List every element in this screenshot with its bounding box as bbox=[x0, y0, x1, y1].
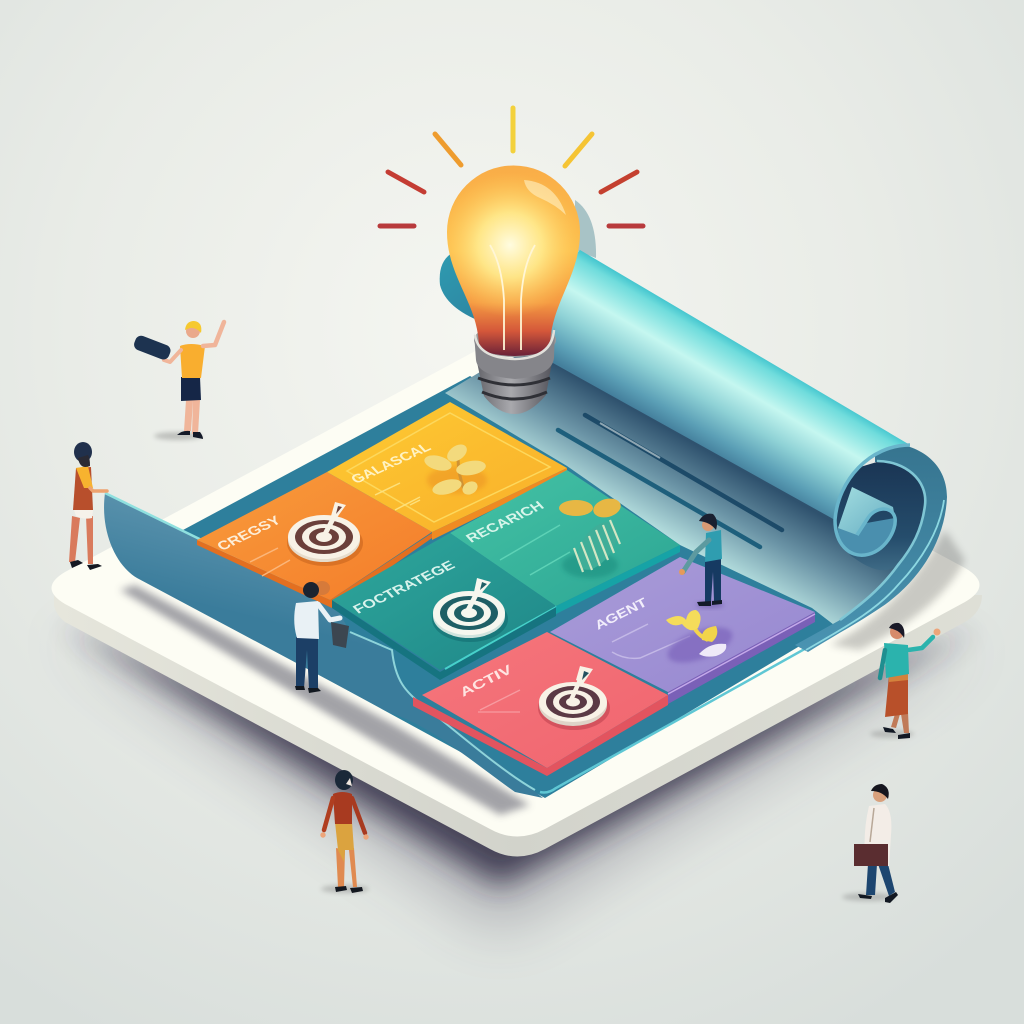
platform top surface bbox=[52, 328, 980, 836]
icon: target bbox=[432, 578, 508, 642]
curl light lip bbox=[806, 500, 944, 650]
bulb rays bbox=[380, 108, 643, 226]
card surface bbox=[332, 533, 556, 670]
card highlight edge bbox=[668, 614, 815, 694]
outer curl band bbox=[795, 443, 947, 652]
collar rim bbox=[475, 330, 554, 359]
person: woman with megaphone bbox=[132, 321, 224, 440]
grey curl behind bulb bbox=[575, 200, 596, 258]
card: red bbox=[413, 632, 668, 776]
person: woman in red top bbox=[320, 770, 369, 893]
base sheet highlight edge bbox=[540, 632, 835, 792]
inner tube bbox=[838, 487, 895, 535]
card surface bbox=[450, 470, 680, 606]
flap top edge bbox=[105, 493, 335, 605]
card thickness bbox=[432, 468, 567, 540]
platform side bbox=[54, 590, 982, 856]
collar back bbox=[474, 323, 556, 357]
card surface bbox=[197, 472, 432, 600]
card surface bbox=[327, 402, 567, 532]
card label: AGENT bbox=[593, 595, 650, 633]
surface shadow under curl bbox=[830, 530, 965, 650]
roll body bbox=[530, 250, 910, 520]
person: man on purple card bbox=[679, 514, 724, 608]
paper text line faint bbox=[600, 423, 660, 458]
card: orange bbox=[197, 472, 432, 608]
light bulb bbox=[380, 108, 643, 414]
card: green bbox=[450, 470, 680, 614]
tube lower curl bbox=[838, 518, 895, 555]
roll far end bbox=[440, 240, 565, 345]
icon: striped seed sprout bbox=[559, 496, 625, 578]
collar front bbox=[474, 327, 555, 379]
card thickness bbox=[668, 612, 815, 704]
person: man holding flap bbox=[69, 442, 107, 570]
paper text line one bbox=[585, 415, 782, 530]
flap inner edge bbox=[350, 632, 535, 790]
curl inner strip bbox=[840, 461, 925, 620]
card surface bbox=[550, 557, 815, 692]
curled flap bbox=[104, 493, 543, 798]
card detail lines bbox=[375, 483, 420, 510]
icon: target bbox=[538, 666, 610, 730]
card label: ACTIV bbox=[458, 662, 515, 700]
icon: target bbox=[287, 502, 363, 566]
icon: purple sprout bbox=[663, 610, 737, 670]
card label: RECARICH bbox=[463, 498, 547, 545]
card: purple bbox=[550, 557, 815, 704]
spiral rim bbox=[835, 445, 910, 555]
card detail lines bbox=[612, 624, 690, 658]
card label: GALASCAL bbox=[348, 440, 434, 486]
card: yellow bbox=[327, 402, 567, 540]
card: dark teal bbox=[332, 533, 556, 680]
icon: yellow sprout bbox=[423, 441, 487, 498]
surface shadow under flap bbox=[120, 585, 530, 815]
card thickness bbox=[556, 545, 680, 614]
paper text line two bbox=[558, 430, 760, 547]
bulb glass bbox=[447, 166, 580, 356]
screw threads bbox=[477, 362, 552, 414]
card surface bbox=[422, 632, 668, 768]
card label: FOCTRATEGE bbox=[350, 558, 458, 616]
card thickness bbox=[332, 600, 556, 680]
card thickness bbox=[413, 695, 668, 776]
platform shadow bbox=[62, 625, 975, 885]
roll interior dark bbox=[830, 462, 925, 570]
card detail lines bbox=[250, 548, 290, 576]
card highlight edge bbox=[445, 606, 556, 669]
card detail lines bbox=[478, 690, 520, 712]
card label: CREGSY bbox=[214, 513, 284, 553]
person: man in white shirt bbox=[294, 581, 349, 693]
bulb glow bbox=[447, 166, 580, 356]
card inner border bbox=[347, 413, 550, 522]
flap body bbox=[104, 493, 543, 798]
paper roll bbox=[440, 200, 947, 652]
person: man with briefcase bbox=[842, 784, 898, 903]
glass highlight bbox=[524, 180, 566, 215]
platform wide soft shadow bbox=[50, 630, 985, 930]
blue base sheet bbox=[183, 376, 860, 798]
thread bands bbox=[478, 378, 550, 399]
card thickness bbox=[197, 533, 432, 608]
platform bbox=[52, 328, 982, 856]
person: woman in teal top bbox=[870, 623, 940, 739]
card detail lines bbox=[500, 525, 570, 575]
unrolled light paper bbox=[445, 340, 920, 628]
filament bbox=[490, 245, 535, 350]
